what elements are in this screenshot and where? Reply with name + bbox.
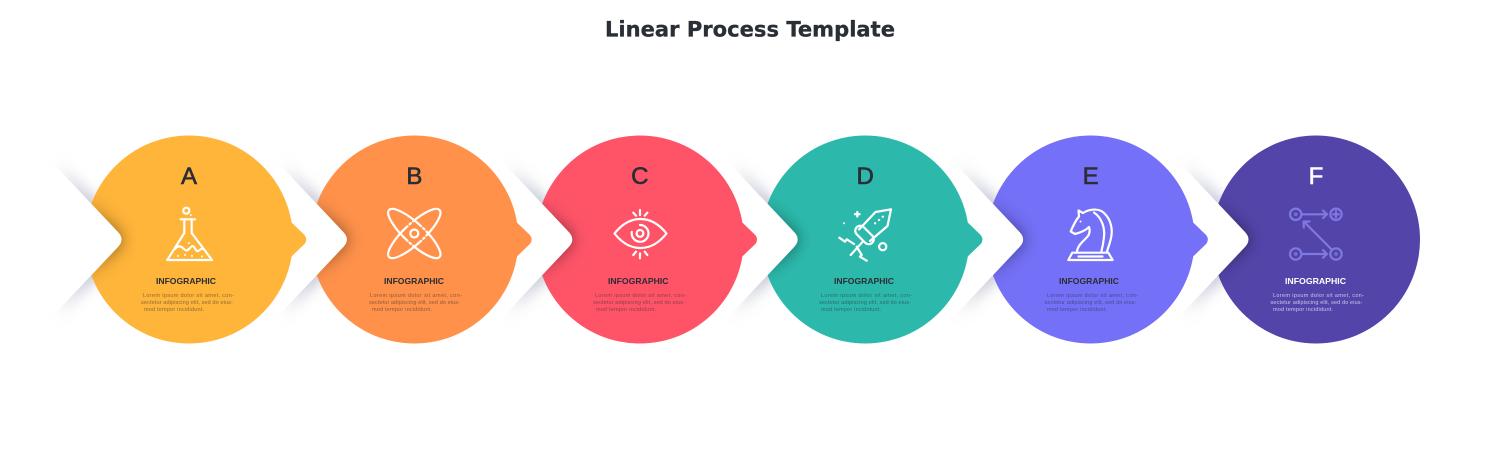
text block A: sectetur adipiscing elit, sed do eius- [141,300,233,306]
text block E: Lorem ipsum dolor sit amet, con- [1047,293,1138,299]
letter F: F [1309,163,1323,190]
icon: atom [382,203,446,264]
text block E: mod tempor incididunt. [1047,307,1107,313]
heading E: INFOGRAPHIC [1059,276,1119,286]
icon: flask [167,208,212,260]
text block B: mod tempor incididunt. [372,307,432,313]
text block C: Lorem ipsum dolor sit amet, con- [595,293,686,299]
text block A: Lorem ipsum dolor sit amet, con- [143,293,234,299]
text block C [593,293,686,313]
heading A: INFOGRAPHIC [156,276,216,286]
text block D [819,293,912,313]
letter C: C [631,163,648,190]
shapes C [501,136,757,344]
panel D [726,136,982,344]
panel B [275,136,532,344]
heading B: INFOGRAPHIC [384,276,444,286]
panel A [50,136,306,344]
shapes D [726,136,982,344]
icon: eye [614,210,666,258]
shapes B [275,136,532,344]
letter D: D [857,163,874,190]
panel F [1177,136,1420,344]
shapes F [1177,136,1420,344]
text block D: Lorem ipsum dolor sit amet, con- [821,293,912,299]
panel E [952,136,1208,344]
text block E: sectetur adipiscing elit, sed do eius- [1044,300,1137,306]
text block B: Lorem ipsum dolor sit amet, con- [370,293,462,299]
text block E [1044,293,1138,313]
text block C: sectetur adipiscing elit, sed do eius- [593,300,685,306]
text block A: mod tempor incididunt. [144,307,204,313]
text block F: mod tempor incididunt. [1273,307,1333,313]
shapes A [50,136,306,344]
text block D: sectetur adipiscing elit, sed do eius- [819,300,911,306]
text block B: sectetur adipiscing elit, sed do eius- [369,300,460,306]
letter E: E [1083,163,1099,190]
text block F: Lorem ipsum dolor sit amet, con- [1273,293,1364,299]
text block F [1270,293,1364,313]
text block D: mod tempor incididunt. [821,307,881,313]
heading F: INFOGRAPHIC [1285,276,1346,286]
text block A [141,293,234,313]
letter A: A [181,163,197,190]
title: Linear Process Template [605,18,895,42]
letter B: B [406,163,422,190]
text block C: mod tempor incididunt. [596,307,656,313]
heading C: INFOGRAPHIC [608,276,668,286]
icon: rocket [839,209,891,261]
text block B [369,293,462,313]
text block F: sectetur adipiscing elit, sed do eius- [1270,300,1363,306]
icon: chess knight [1068,210,1113,260]
shapes E [952,136,1208,344]
heading D: INFOGRAPHIC [834,276,894,286]
panel C [501,136,757,344]
icon: flow arrows [1290,209,1342,260]
